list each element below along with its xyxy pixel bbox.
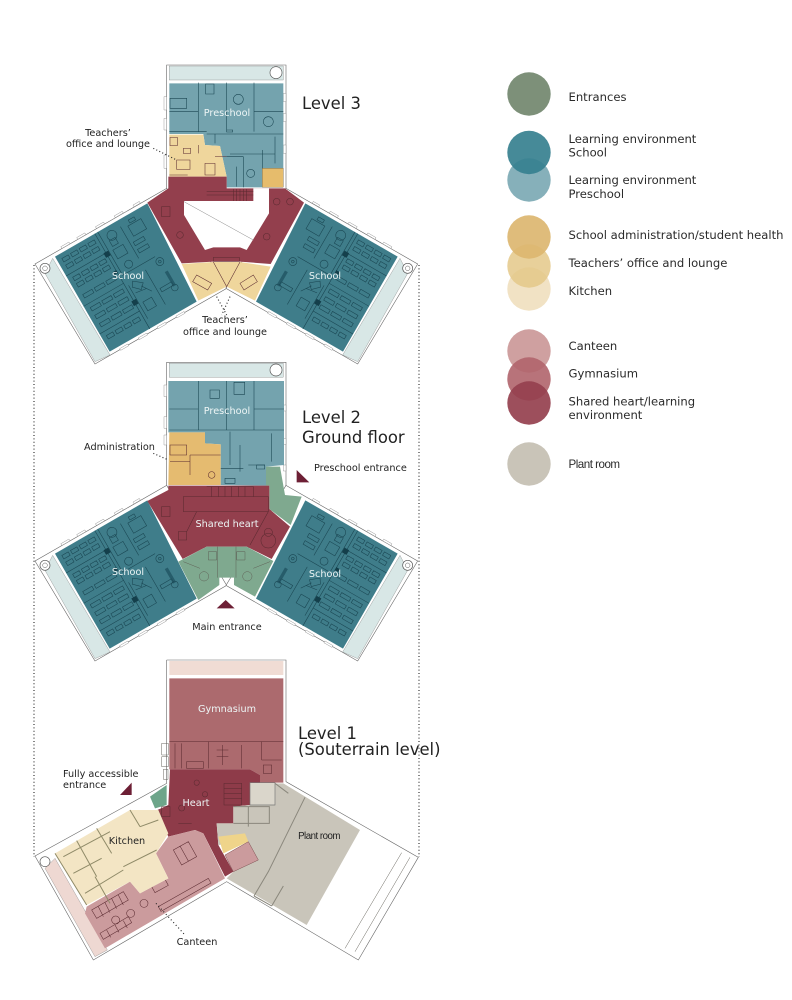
label: plant room: Plant room [298,831,340,842]
legend [507,72,784,486]
kitchen walls [55,810,158,905]
label: preschool level 2: Preschool [204,406,250,417]
administration [168,432,221,485]
terrace south west [45,858,107,957]
label: teachers office south: Teachers’ [201,315,248,326]
label: administration: Administration [84,442,155,453]
teachers office [169,135,227,177]
void [184,188,269,250]
entrance detail [183,547,270,581]
administration detail [170,445,221,478]
label: school right level 3: School [309,271,341,282]
heading: level 2: Ground floor [302,428,405,447]
legend item: shared heart: Shared heart/learning [568,394,695,408]
inner wall lines [345,853,410,952]
heading: level 1: (Souterrain level) [298,740,440,759]
small admin room [218,833,248,853]
legend item: entrances: Entrances [568,90,626,104]
heart [156,769,260,877]
preschool entrance area [266,467,302,525]
legend item: canteen [507,329,617,373]
void diagonal line [184,202,253,240]
facade windows [164,93,286,168]
heart furniture [162,189,293,261]
label: preschool level 3: Preschool [204,108,250,119]
small pink room [225,842,258,872]
preschool walls [169,381,284,472]
label: accessible entrance: entrance [63,780,106,791]
right school wing [226,485,418,661]
label: accessible entrance [63,769,139,791]
label: canteen: Canteen [177,937,217,948]
terrace [169,66,283,80]
right school wing [226,188,418,364]
stair spiral [40,857,50,867]
heading: level 3: Level 3 [302,94,361,113]
canteen furniture [92,842,211,939]
legend item: learning environment preschool [507,158,697,202]
plant room [217,783,360,925]
legend item: plant room: Plant room [568,458,620,471]
label: kitchen: Kitchen [109,836,145,847]
label: gymnasium: Gymnasium [198,704,256,715]
preschool rooms [169,83,283,187]
teachers office detail [169,137,227,175]
facade windows [164,385,286,471]
legend item: kitchen [507,267,612,311]
preschool walls [169,83,283,187]
lighter plant rooms [250,783,275,805]
stair spiral [270,364,282,376]
terrace north [169,661,283,675]
label: school right level 2: School [309,569,341,580]
building outline north block [167,362,286,495]
preschool furniture [170,84,273,177]
canteen leader line [156,903,185,935]
preschool rooms [168,381,284,486]
heading: level 1 [298,724,440,759]
administration leader line [153,453,168,460]
label: teachers office south: office and lounge [183,327,267,338]
shared heart [147,486,290,559]
shared heart [147,177,304,264]
label: teachers office south [183,315,267,338]
legend item: learning environment school: School [568,146,607,160]
gymnasium [169,678,283,783]
entrance green [150,785,167,808]
icon: preschool entrance marker [297,470,309,482]
small admin room [262,168,283,187]
heart stair and furniture [162,780,242,823]
legend item: shared heart [507,381,695,425]
legend item: canteen: Canteen [568,339,617,353]
legend item: school administration [507,215,784,259]
south office detail [193,262,257,290]
label: teachers office level 3 [66,128,150,150]
label: school left level 2: School [112,567,144,578]
level 3 leader lines [153,148,230,315]
legend item: teachers office: Teachers’ office and lounge [568,256,727,270]
legend item: learning environment school [507,131,697,174]
heart detail [162,487,276,548]
label: shared heart: Shared heart [195,519,259,530]
heading: level 1: Level 1 [298,724,357,743]
legend item: learning environment preschool: Preschool [568,187,624,201]
icon: main entrance marker [217,600,235,608]
legend item: shared heart: environment [568,408,643,422]
main entrance area [178,547,273,600]
building outline [35,660,418,960]
label: teachers office level 3: Teachers’ [84,128,131,139]
legend item: plant room [507,442,620,486]
left school wing [35,485,227,661]
level 1 floor plan [35,660,418,960]
plant room walls [233,783,305,906]
heading: level 2 [302,408,405,447]
legend item: kitchen: Kitchen [568,284,612,298]
level 2 floor plan [35,362,418,661]
icon: accessible entrance marker [120,783,132,795]
gym service rooms [169,742,283,773]
teachers office south [182,262,271,301]
level 3 floor plan [35,65,418,364]
label: heart: Heart [183,798,210,809]
legend item: entrances [507,72,626,116]
canteen [85,830,225,948]
dotted connector right [418,265,420,857]
legend item: learning environment school: Learning environment [568,132,697,146]
heading: level 2: Level 2 [302,408,361,427]
legend item: school administration: School administration/student health [568,228,784,242]
legend item: teachers office [507,244,727,288]
label: teachers office level 3: office and lounge [66,139,150,150]
kitchen [55,810,168,905]
dotted connector left [33,265,35,857]
building outline north block [167,65,286,188]
preschool furniture [210,382,265,483]
legend item: gymnasium [507,357,638,401]
side doors [162,743,168,779]
label: preschool entrance: Preschool entrance [314,463,407,474]
label: accessible entrance: Fully accessible [63,769,139,780]
legend item: gymnasium: Gymnasium [568,366,638,380]
left school wing [35,188,227,364]
label: school left level 3: School [112,271,144,282]
label: main entrance: Main entrance [192,622,262,633]
stair spiral [270,67,282,79]
terrace [169,363,283,377]
legend item: learning environment preschool: Learning environment [568,173,697,187]
